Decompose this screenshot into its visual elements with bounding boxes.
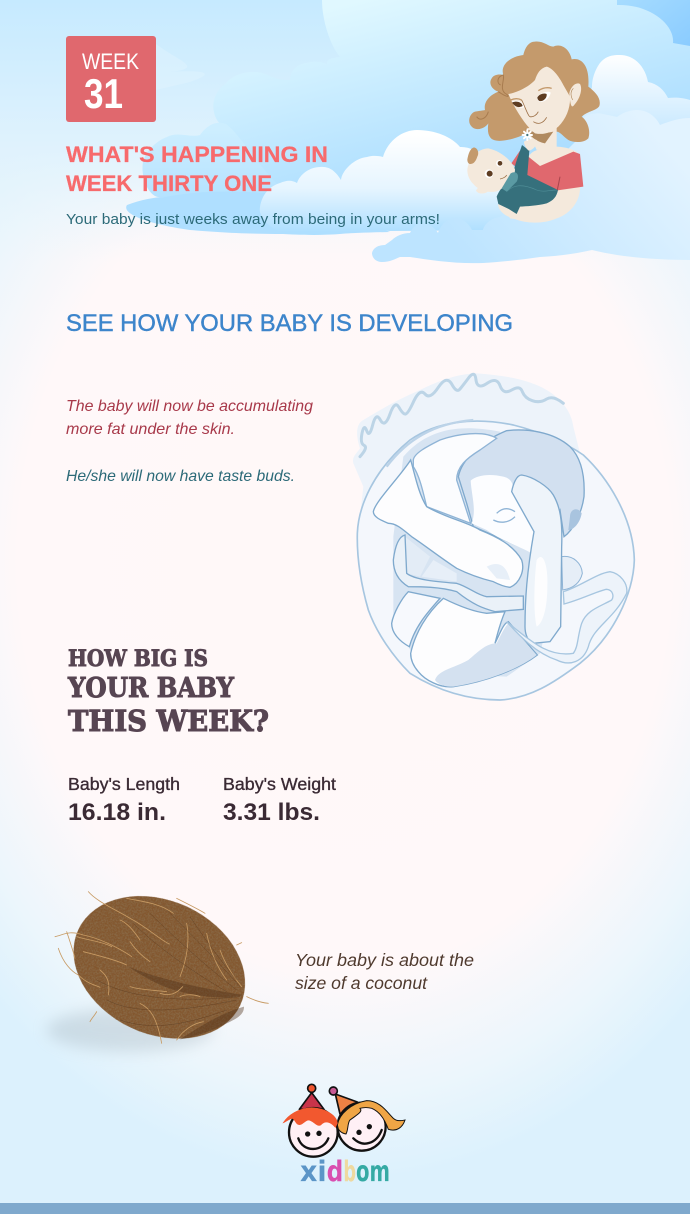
baby collar	[502, 172, 518, 192]
shadow	[47, 1008, 213, 1052]
girl hair	[337, 1101, 405, 1134]
inner arc	[387, 420, 473, 467]
logo wordmark: d	[327, 1154, 343, 1188]
mother's face	[508, 67, 570, 134]
week badge: WEEK	[82, 49, 139, 74]
size heading: THIS WEEK?	[68, 704, 269, 738]
big arm	[373, 460, 523, 587]
logo wordmark: om	[356, 1154, 390, 1188]
boy hair	[283, 1108, 337, 1127]
red top	[511, 151, 583, 191]
coconut caption: Your baby is about the	[295, 950, 474, 970]
dark backdrop	[393, 428, 560, 677]
flower	[523, 130, 532, 140]
womb circle	[357, 421, 634, 700]
development facts: more fat under the skin.	[66, 421, 235, 438]
girl hat	[335, 1094, 357, 1114]
title	[66, 142, 328, 196]
dark ridge	[128, 967, 244, 1039]
eyelids and eyes	[512, 92, 551, 108]
coconut caption: size of a coconut	[295, 973, 428, 993]
baby's weight: 3.31 lbs.	[223, 799, 320, 826]
mid cloud	[142, 123, 274, 198]
umbilical cord	[507, 572, 627, 663]
size heading	[67, 646, 269, 738]
baby hair	[467, 147, 478, 164]
hair curl	[498, 75, 508, 96]
boy hat	[299, 1093, 324, 1109]
baby's length: 16.18 in.	[68, 799, 166, 826]
faces detail	[298, 1130, 382, 1149]
coconut caption	[295, 950, 474, 993]
footer bar	[0, 1203, 690, 1214]
teal sling	[497, 145, 558, 214]
development facts	[66, 398, 313, 485]
title: WHAT'S HAPPENING IN	[66, 142, 328, 167]
ear	[568, 509, 582, 530]
right white cloud	[582, 55, 690, 125]
logo wordmark	[300, 1154, 390, 1188]
baby's weight	[223, 774, 336, 826]
size heading: YOUR BABY	[67, 673, 235, 704]
left thigh	[392, 592, 440, 647]
illustration: fetus in womb	[353, 373, 634, 700]
placenta	[353, 373, 580, 517]
front cloud	[372, 110, 690, 263]
week badge: 31	[84, 70, 123, 117]
boy face	[289, 1108, 338, 1157]
size heading: HOW BIG IS	[68, 646, 208, 672]
title: WEEK THIRTY ONE	[66, 171, 272, 196]
logo wordmark: xi	[300, 1154, 327, 1188]
girl face	[338, 1103, 386, 1151]
wavy placenta edge	[360, 374, 563, 457]
white cloud	[260, 130, 520, 235]
baby ear	[476, 188, 488, 194]
photo: coconut	[47, 869, 268, 1066]
chest and arm	[498, 147, 580, 223]
week badge	[66, 36, 156, 122]
blue lens	[126, 197, 390, 235]
subtitle: Your baby is just weeks away from being in your arms!	[66, 211, 440, 228]
header clouds	[0, 0, 690, 263]
hand	[524, 139, 537, 151]
upper forearm	[413, 434, 497, 523]
baby's length	[68, 774, 180, 826]
ear	[569, 83, 581, 106]
logo: kidbom	[283, 1084, 405, 1188]
nose and mouth	[522, 100, 547, 123]
section heading: SEE HOW YOUR BABY IS DEVELOPING	[66, 310, 513, 337]
head	[458, 430, 584, 552]
baby head	[467, 148, 515, 192]
fibres	[55, 892, 268, 1043]
forearm over face	[512, 475, 562, 643]
logo wordmark: b	[343, 1154, 356, 1188]
mother's hair	[469, 42, 600, 142]
development facts: He/she will now have taste buds.	[66, 468, 295, 485]
neck	[527, 123, 557, 150]
development facts: The baby will now be accumulating	[66, 398, 313, 415]
baby face	[485, 169, 493, 178]
faint left cloud	[156, 45, 157, 46]
back cloud	[214, 0, 690, 184]
baby's length: Baby's Length	[68, 774, 180, 794]
lower right lobe	[562, 556, 582, 590]
thigh and bottom	[411, 598, 537, 687]
baby's weight: Baby's Weight	[223, 774, 336, 794]
face	[471, 475, 534, 553]
husk	[50, 869, 268, 1066]
back limb triangles	[405, 537, 430, 577]
leg loop	[393, 535, 523, 612]
illustration: mother and baby	[467, 42, 600, 223]
